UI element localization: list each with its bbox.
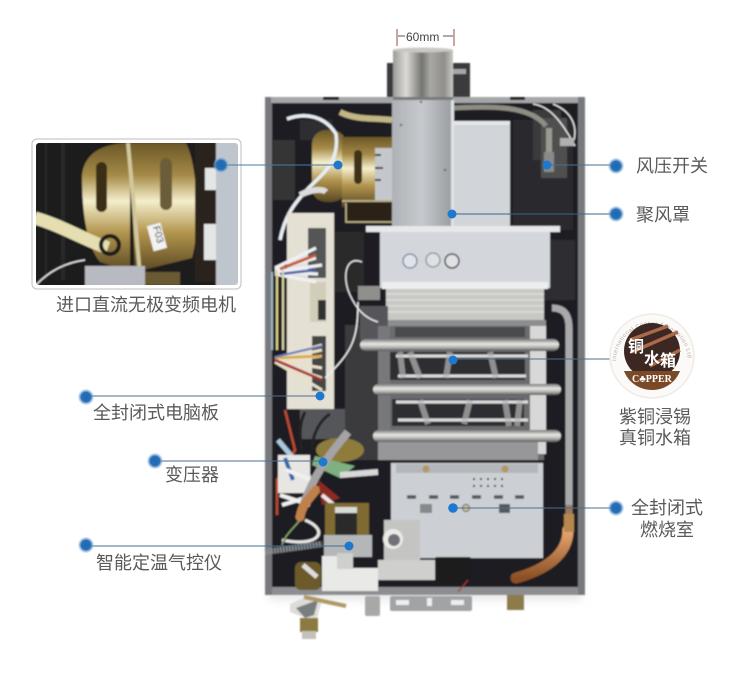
callout: transformer: [147, 453, 328, 485]
transformer and wiring: [277, 409, 378, 590]
bottom connectors: [290, 595, 524, 639]
callout: computer board: [78, 389, 324, 423]
white wires near motor: [280, 116, 337, 240]
flexible hose: [453, 107, 546, 126]
wind pressure switch: [533, 104, 575, 178]
badge: copper tank: [609, 313, 695, 399]
callout: wind pressure switch: 风压开关: [636, 156, 708, 176]
callout: motor: [213, 157, 342, 173]
callout: combustion chamber: [448, 498, 703, 540]
callout: combustion chamber: 全封闭式: [631, 498, 703, 518]
badge: copper tank: C♣PPER: [632, 374, 673, 385]
callout: air hood: [448, 205, 690, 225]
gas control valve: [265, 503, 378, 591]
water outlet pipe: [516, 308, 574, 578]
inset caption: 进口直流无极变频电机: [56, 295, 236, 315]
callout: computer board: 全封闭式电脑板: [93, 403, 219, 423]
soft shadow behind heater: [268, 105, 582, 600]
callout: copper water tank: 真铜水箱: [619, 428, 691, 448]
heat exchanger fins: [346, 261, 546, 340]
dimension: 60mm: 60mm: [406, 30, 439, 44]
badge: copper tank: 铜: [628, 338, 644, 356]
callout: air hood: 聚风罩: [636, 205, 690, 225]
callout: wind pressure switch: [542, 156, 708, 176]
flue mounting bracket: [387, 63, 470, 98]
flue pipe: [393, 48, 453, 102]
badge: copper tank: 箱: [660, 351, 676, 370]
hood lid and top box: [366, 226, 560, 289]
callout: combustion chamber: 燃烧室: [640, 520, 694, 540]
badge: copper tank: International Copper Association Ltd China: [612, 322, 692, 360]
panel: motor inset photo: F03: [150, 225, 165, 245]
computer control board: [272, 213, 358, 409]
motor: [312, 130, 394, 224]
copper water tank: [360, 326, 561, 460]
fan housing: [392, 100, 454, 226]
callout: gas control valve: [78, 537, 354, 573]
callout: copper water tank: [448, 313, 695, 448]
callout: gas control valve: 智能定温气控仪: [96, 553, 222, 573]
panel: motor inset photo: [32, 139, 241, 315]
dimension: 60mm: [397, 29, 454, 46]
badge: copper tank: 水: [644, 350, 660, 368]
combustion chamber: [378, 463, 543, 592]
tank caption: 紫铜浸锡: [619, 407, 691, 427]
air hood box: [454, 121, 510, 226]
heater casing: [265, 97, 585, 595]
callout: transformer: 变压器: [165, 465, 219, 485]
water heater photo: [265, 48, 585, 639]
